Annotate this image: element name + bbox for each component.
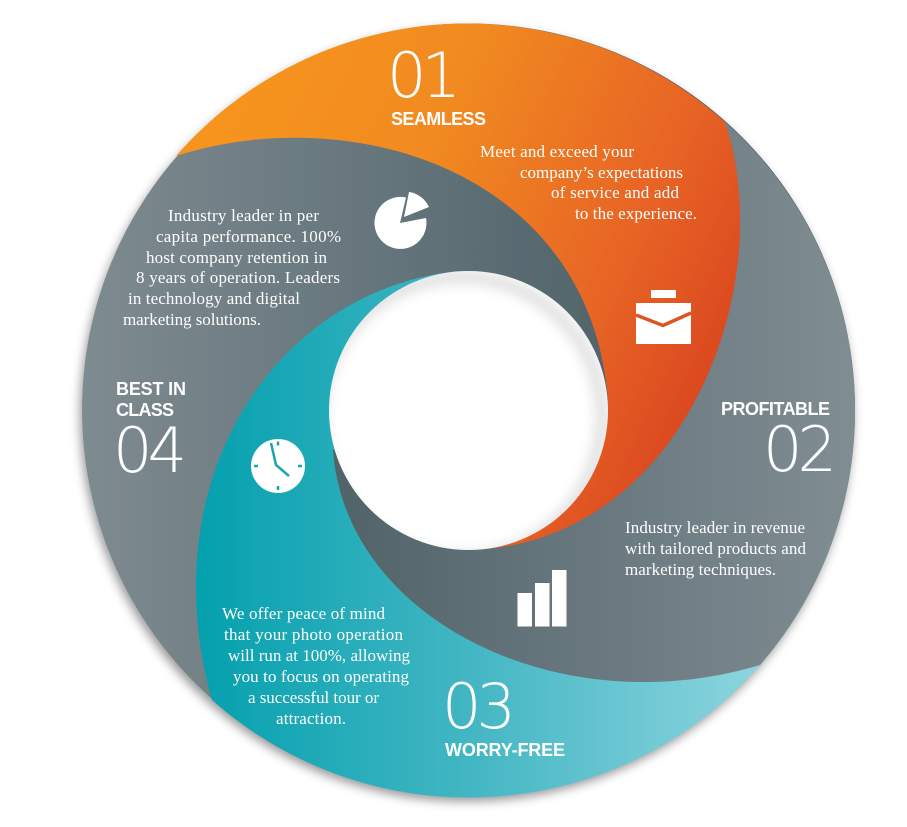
text: worry-free description: will run at 100%, allowing bbox=[228, 646, 410, 665]
icon: bar chart bbox=[518, 570, 566, 626]
text: seamless description: to the experience. bbox=[575, 204, 697, 223]
text: best in class description: Industry leader in per bbox=[168, 206, 319, 225]
text: best in class description: capita performance. 100% bbox=[156, 227, 341, 246]
center hole bbox=[320, 271, 608, 559]
heading: best in class: BEST IN bbox=[116, 379, 186, 399]
heading: worry-free: WORRY-FREE bbox=[445, 740, 565, 760]
text: worry-free description bbox=[222, 604, 410, 728]
icon: clock bbox=[251, 439, 305, 493]
panel: worry-free band (03) bbox=[196, 271, 760, 798]
text: worry-free description: We offer peace of mind bbox=[222, 604, 386, 623]
number 02: 02 bbox=[763, 413, 832, 486]
text: seamless description: company’s expectations bbox=[520, 163, 683, 182]
panel: best in class background (04) bbox=[82, 24, 855, 796]
heading: profitable: PROFITABLE bbox=[721, 399, 830, 419]
text: worry-free description: a successful tour or bbox=[248, 688, 379, 707]
icon: pie chart bbox=[374, 192, 429, 249]
panel: profitable band (02) bbox=[333, 122, 855, 682]
text: worry-free description: attraction. bbox=[276, 709, 346, 728]
text: seamless description: of service and add bbox=[551, 183, 680, 202]
number 01: 01 bbox=[387, 39, 456, 112]
text: seamless description: Meet and exceed your bbox=[480, 142, 634, 161]
text: profitable description: Industry leader in revenue bbox=[625, 518, 805, 537]
text: profitable description: marketing techniques. bbox=[625, 560, 776, 579]
text: seamless description bbox=[480, 142, 697, 223]
text: best in class description: in technology and digital bbox=[128, 289, 300, 308]
text: profitable description: with tailored products and bbox=[625, 539, 806, 558]
heading: best in class bbox=[116, 379, 186, 420]
text: best in class description: 8 years of operation. Leaders bbox=[136, 268, 340, 287]
panel: seamless band (01) bbox=[176, 24, 740, 549]
text: best in class description: host company retention in bbox=[146, 248, 328, 267]
text: profitable description bbox=[625, 518, 806, 579]
text: worry-free description: you to focus on operating bbox=[233, 667, 410, 686]
text: best in class description bbox=[123, 206, 341, 329]
number 04: 04 bbox=[113, 414, 182, 487]
text: best in class description: marketing solutions. bbox=[123, 310, 261, 329]
text: worry-free description: that your photo operation bbox=[224, 625, 404, 644]
number 03: 03 bbox=[442, 670, 511, 743]
heading: seamless: SEAMLESS bbox=[391, 109, 486, 129]
icon: briefcase bbox=[636, 290, 691, 344]
heading: best in class: CLASS bbox=[116, 400, 174, 420]
